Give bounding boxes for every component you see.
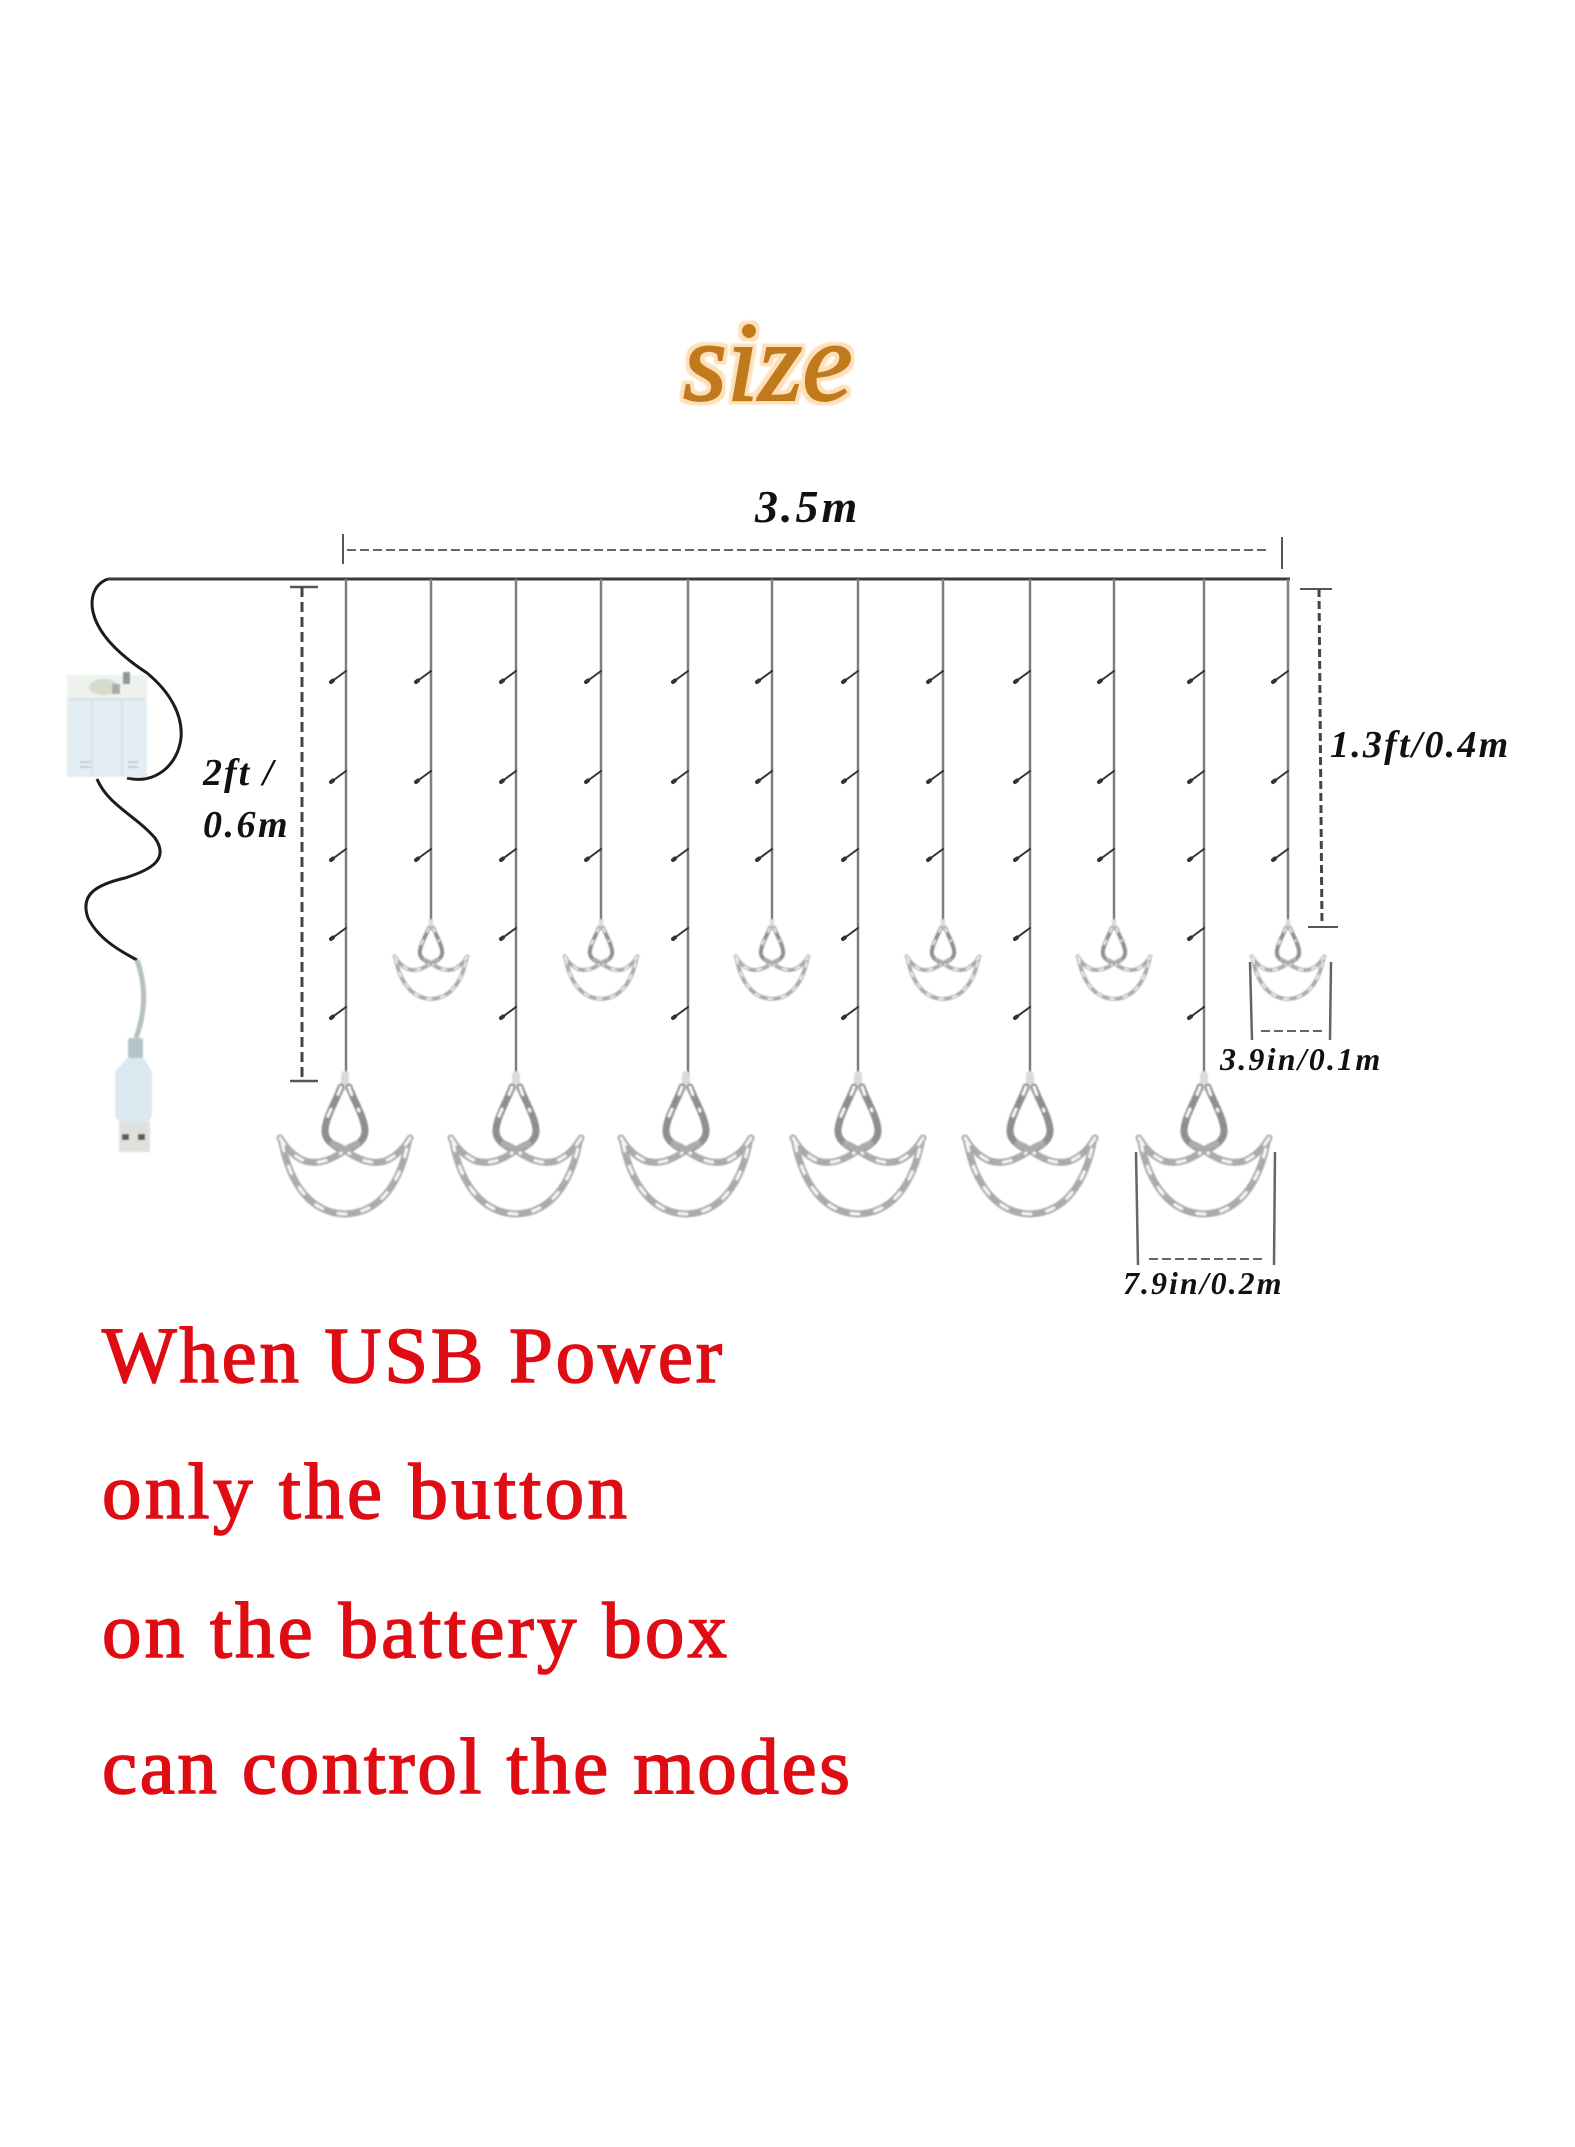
top wire (108, 578, 1290, 580)
dimension: 3.9in/0.1m: 3.9in/0.1m (1219, 1041, 1382, 1077)
dimension: 1.3ft/0.4m (1300, 589, 1510, 927)
small diya lamps (395, 921, 1324, 999)
cable from battery box to USB (86, 779, 160, 960)
battery box (67, 672, 147, 777)
dimension: 2ft / 0.6m (202, 587, 318, 1081)
dimension: 7.9in/0.2m (1123, 1152, 1283, 1301)
note: USB power text (102, 1313, 850, 1811)
note: USB power text: When USB Power (102, 1313, 722, 1400)
dimension: total width 3.5m: 3.5m (754, 481, 860, 532)
note: USB power text: can control the modes (102, 1724, 850, 1811)
large diya lamps (280, 1075, 1269, 1214)
dimension: 2ft / 0.6m: 2ft / (202, 752, 277, 794)
dimension: 1.3ft/0.4m: 1.3ft/0.4m (1330, 724, 1510, 766)
USB plug (115, 960, 152, 1152)
title: size: size (683, 300, 852, 425)
note: USB power text: only the button (102, 1449, 627, 1536)
cable from curtain to battery box (92, 579, 181, 779)
hanging light strings (331, 579, 1288, 1074)
dimension: total width 3.5m (343, 481, 1282, 569)
dimension: 7.9in/0.2m: 7.9in/0.2m (1123, 1265, 1283, 1301)
dimension: 2ft / 0.6m: 0.6m (203, 804, 290, 846)
note: USB power text: on the battery box (102, 1588, 727, 1675)
dimension: 3.9in/0.1m (1219, 962, 1382, 1077)
